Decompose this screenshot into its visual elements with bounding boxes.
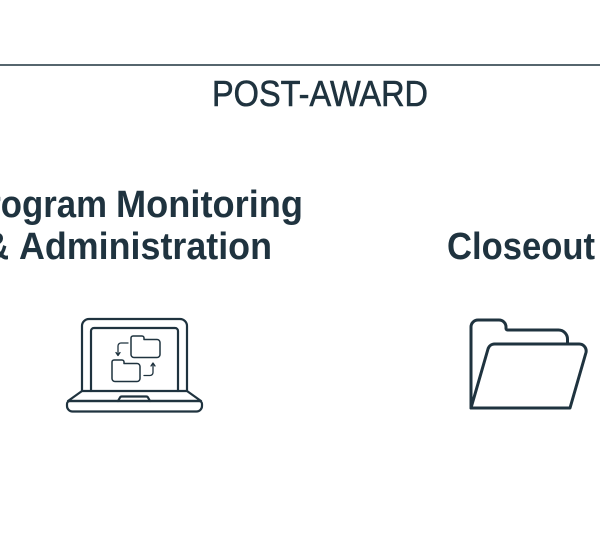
arrow: folder up to down: [116, 343, 128, 356]
heading: post-award: POST-AWARD: [212, 73, 428, 114]
icon: open folder: [471, 320, 586, 408]
heading: program monitoring and administration: Administration: [19, 226, 272, 268]
icon: upper folder: [131, 336, 160, 358]
heading: program monitoring and administration: [0, 184, 303, 268]
icon: laptop with folders: [67, 319, 202, 412]
arrow: folder down to up: [144, 363, 155, 376]
icon: lower folder: [112, 360, 140, 382]
heading: program monitoring and administration: Monitoring: [116, 184, 303, 226]
